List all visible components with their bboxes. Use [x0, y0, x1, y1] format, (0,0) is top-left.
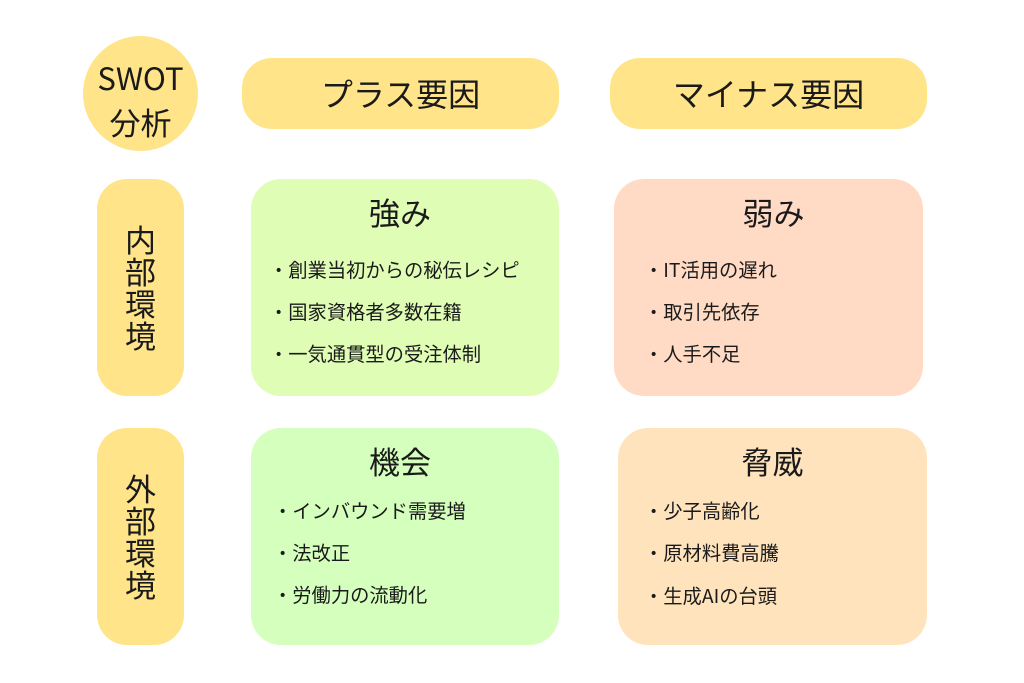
list item: ・インバウンド需要増 — [273, 496, 466, 524]
panel heading: 脅威 — [742, 438, 804, 483]
heading text: プラス要因 — [321, 70, 480, 116]
panel: 脅威 — [618, 428, 927, 645]
vertical text: 内部環境 — [125, 216, 156, 357]
list item: ・生成AIの台頭 — [644, 581, 777, 609]
list item: ・IT活用の遅れ — [644, 255, 777, 283]
list item: ・労働力の流動化 — [273, 580, 427, 608]
vertical text: 外部環境 — [125, 465, 156, 606]
badge text — [97, 54, 184, 144]
panel: 弱み — [614, 179, 923, 396]
list item: ・取引先依存 — [644, 297, 760, 325]
list item: ・法改正 — [273, 538, 350, 566]
list item: ・人手不足 — [644, 339, 740, 367]
badge: SWOT分析 — [83, 36, 198, 151]
column header: マイナス要因 — [610, 58, 927, 129]
panel heading: 強み — [369, 189, 431, 234]
panel heading: 弱み — [742, 189, 804, 234]
panel: 強み — [251, 179, 559, 396]
list item: ・創業当初からの秘伝レシピ — [269, 255, 520, 283]
list item: ・原材料費高騰 — [644, 538, 779, 566]
badge text: 分析 — [110, 99, 172, 144]
heading text: マイナス要因 — [673, 70, 864, 116]
panel: 機会 — [251, 428, 559, 645]
column header: プラス要因 — [242, 58, 559, 129]
list item: ・少子高齢化 — [644, 496, 760, 524]
badge text: SWOT — [97, 54, 184, 99]
row label: 外部環境 — [97, 428, 184, 645]
list item: ・国家資格者多数在籍 — [269, 297, 462, 325]
panel heading: 機会 — [369, 438, 431, 483]
list item: ・一気通貫型の受注体制 — [269, 339, 481, 367]
row label: 内部環境 — [97, 179, 184, 396]
